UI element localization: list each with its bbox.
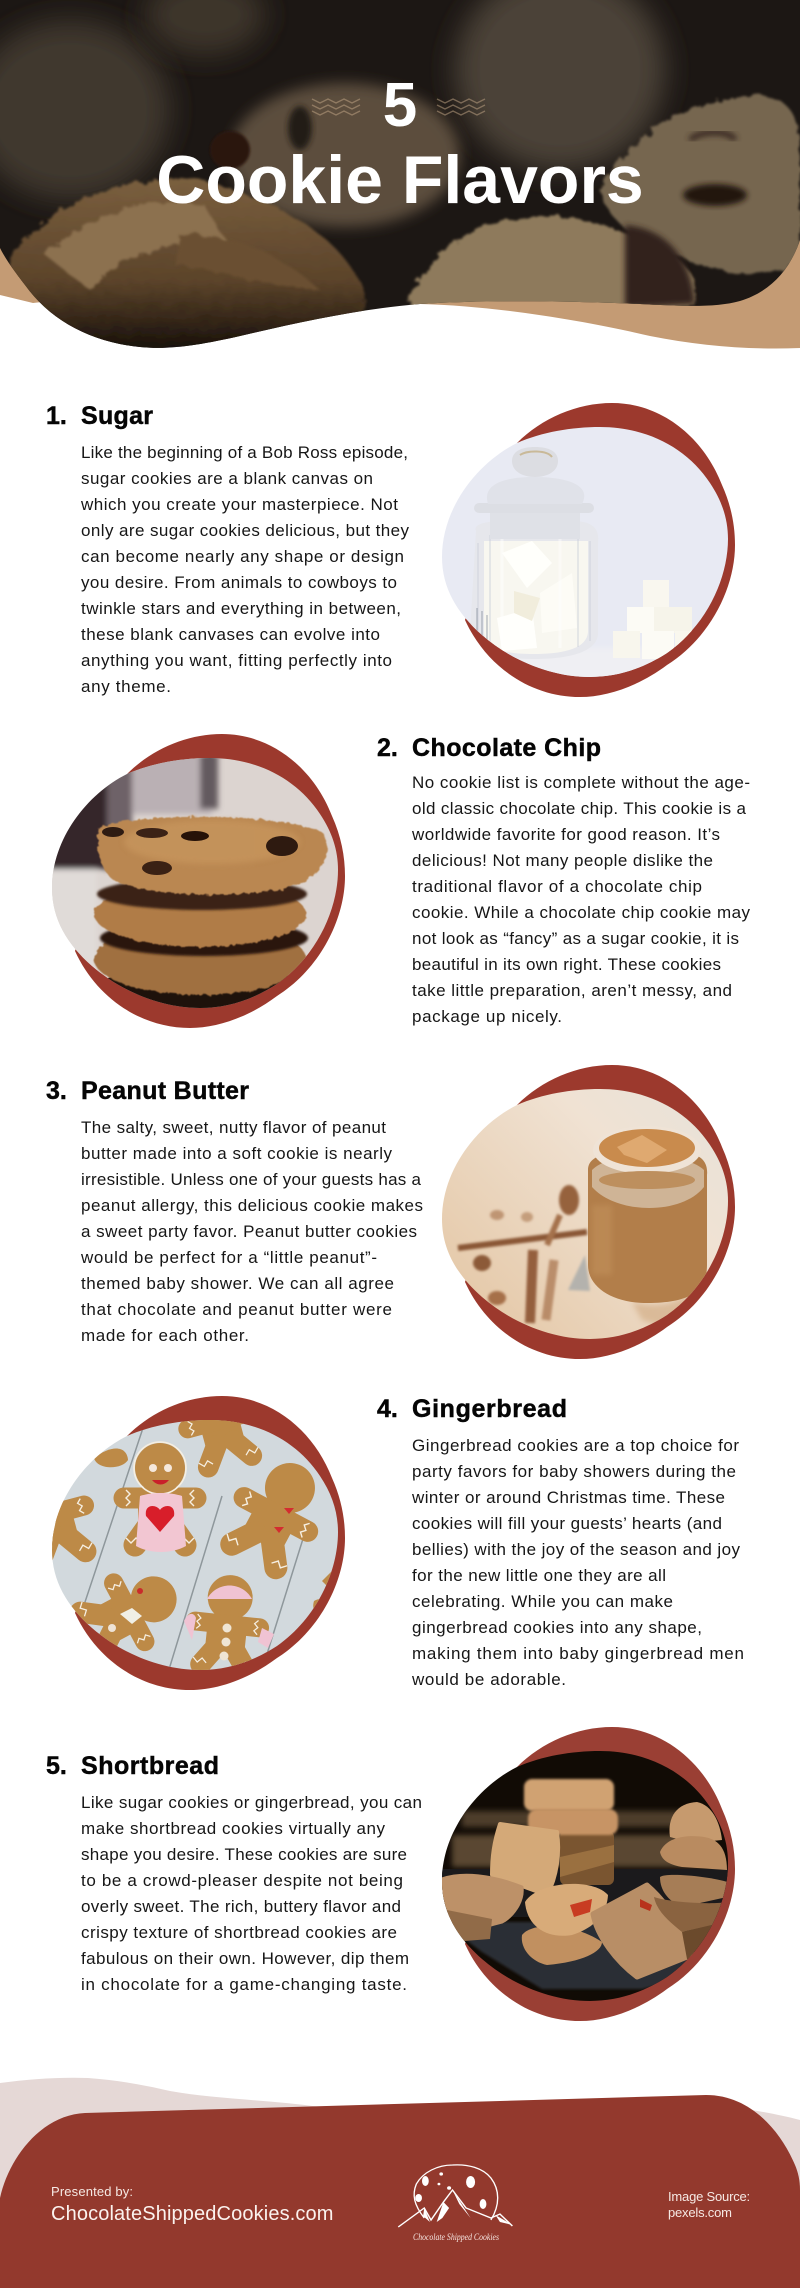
text: chocolate chip: No cookie list is complete without the age- [412, 773, 750, 792]
text: gingerbread: bellies) with the joy of the season and joy [412, 1540, 740, 1559]
text: chocolate chip [411, 773, 750, 1026]
footer pink wave [0, 2078, 800, 2220]
text: gingerbread: celebrating. While you can make [412, 1592, 673, 1611]
text: shortbread [81, 1793, 422, 1994]
heading: chocolate chip: Chocolate Chip [412, 734, 601, 762]
tan wave [0, 240, 800, 348]
panel: sugar [46, 402, 735, 697]
heading: chocolate chip: 2. [377, 734, 398, 762]
heading: sugar [46, 402, 153, 430]
text: sugar: these blank canvases can evolve into [81, 625, 380, 644]
presented by label: Presented by: [51, 2184, 133, 2199]
footer [0, 2078, 800, 2288]
text: shortbread: in chocolate for a game-changing taste. [81, 1975, 407, 1994]
text: sugar [80, 443, 410, 696]
text: shortbread: shape you desire. These cookies are sure [81, 1845, 407, 1864]
text: sugar: Like the beginning of a Bob Ross episode, [81, 443, 408, 462]
image source credit: Image Source: [668, 2189, 750, 2204]
text: gingerbread: for the new little one they are all [412, 1566, 666, 1585]
logo: cookie and mountains [398, 2164, 513, 2243]
text: sugar: twinkle stars and everything in between, [81, 599, 401, 618]
text: peanut butter: a sweet party favor. Peanut butter cookies [81, 1222, 417, 1241]
heading: gingerbread: 4. [377, 1395, 398, 1423]
text: chocolate chip: not look as “fancy” as a sugar cookie, it is [412, 929, 739, 948]
text: sugar: only are sugar cookies delicious, but they [81, 521, 410, 540]
text: gingerbread: would be adorable. [411, 1670, 566, 1689]
title number: 5 [383, 71, 417, 140]
panel: chocolate chip [52, 734, 750, 1028]
panel: shortbread [46, 1727, 735, 2021]
heading: shortbread: 5. [46, 1752, 67, 1780]
title: Cookie Flavors [156, 142, 644, 218]
text: shortbread: fabulous on their own. However, dip them [81, 1949, 409, 1968]
text: sugar: anything you want, fitting perfectly into [81, 651, 392, 670]
text: gingerbread: gingerbread cookies into any shape, [412, 1618, 702, 1637]
image source credit [668, 2189, 750, 2220]
heading: sugar: Sugar [81, 402, 153, 430]
photo: gingerbread men [52, 1396, 345, 1690]
text: sugar: any theme. [81, 677, 171, 696]
text: peanut butter: peanut allergy, this delicious cookie makes [81, 1196, 423, 1215]
text: chocolate chip: cookie. While a chocolate chip cookie may [412, 903, 750, 922]
header banner [0, 0, 800, 348]
footer red panel [0, 2095, 800, 2288]
text: shortbread: crispy texture of shortbread cookies are [81, 1923, 397, 1942]
logo caption: Chocolate Shipped Cookies [413, 2233, 499, 2243]
text: peanut butter: would be perfect for a “little peanut”- [80, 1248, 377, 1267]
text: gingerbread: making them into baby gingerbread men [412, 1644, 744, 1663]
decorative zigzag left [312, 99, 360, 115]
image source credit: pexels.com [668, 2205, 732, 2220]
text: peanut butter: that chocolate and peanut butter were [81, 1300, 392, 1319]
text: gingerbread: Gingerbread cookies are a top choice for [412, 1436, 739, 1455]
photo: sugar jar [442, 403, 735, 697]
heading: shortbread: Shortbread [81, 1752, 219, 1780]
text: gingerbread: party favors for baby showers during the [412, 1462, 736, 1481]
text: gingerbread: cookies will fill your guests’ hearts (and [412, 1514, 722, 1533]
text: sugar: which you create your masterpiece. Not [80, 495, 398, 514]
text: gingerbread [411, 1436, 744, 1689]
decorative zigzag right [437, 99, 485, 115]
text: shortbread: Like sugar cookies or gingerbread, you can [81, 1793, 422, 1812]
photo: shortbread cookies [442, 1727, 735, 2021]
photo: peanut butter jar [442, 1065, 735, 1359]
text: sugar: can become nearly any shape or design [81, 547, 404, 566]
text: peanut butter [80, 1118, 423, 1345]
text: peanut butter: made for each other. [81, 1326, 249, 1345]
text: shortbread: to be a crowd-pleaser despite not being [81, 1871, 403, 1890]
text: shortbread: overly sweet. The rich, buttery flavor and [81, 1897, 401, 1916]
text: chocolate chip: worldwide favorite for good reason. It’s [411, 825, 720, 844]
panel: gingerbread [52, 1395, 744, 1690]
text: sugar: sugar cookies are a blank canvas on [81, 469, 373, 488]
text: shortbread: make shortbread cookies virtually any [81, 1819, 386, 1838]
heading: gingerbread: Gingerbread [412, 1395, 567, 1423]
text: peanut butter: butter made into a soft cookie is nearly [81, 1144, 392, 1163]
text: chocolate chip: traditional flavor of a chocolate chip [412, 877, 702, 896]
photo: chocolate chip cookies [52, 734, 345, 1028]
text: chocolate chip: package up nicely. [412, 1007, 562, 1026]
text: peanut butter: The salty, sweet, nutty flavor of peanut [81, 1118, 386, 1137]
text: gingerbread: winter or around Christmas time. These [411, 1488, 725, 1507]
hero photo of cookies [0, 0, 800, 350]
text: chocolate chip: old classic chocolate chip. This cookie is a [412, 799, 747, 818]
text: peanut butter: irresistible. Unless one of your guests has a [81, 1170, 422, 1189]
text: sugar: you desire. From animals to cowboys to [81, 573, 397, 592]
text: chocolate chip: take little preparation, aren’t messy, and [412, 981, 732, 1000]
heading: sugar: 1. [46, 402, 67, 430]
heading: peanut butter: Peanut Butter [81, 1077, 249, 1105]
text: peanut butter: themed baby shower. We can all agree [81, 1274, 394, 1293]
panel: peanut butter [46, 1065, 735, 1359]
heading: peanut butter: 3. [46, 1077, 67, 1105]
text: chocolate chip: beautiful in its own right. These cookies [412, 955, 721, 974]
text: chocolate chip: delicious! Not many people dislike the [412, 851, 713, 870]
website name: ChocolateShippedCookies.com [51, 2203, 334, 2225]
